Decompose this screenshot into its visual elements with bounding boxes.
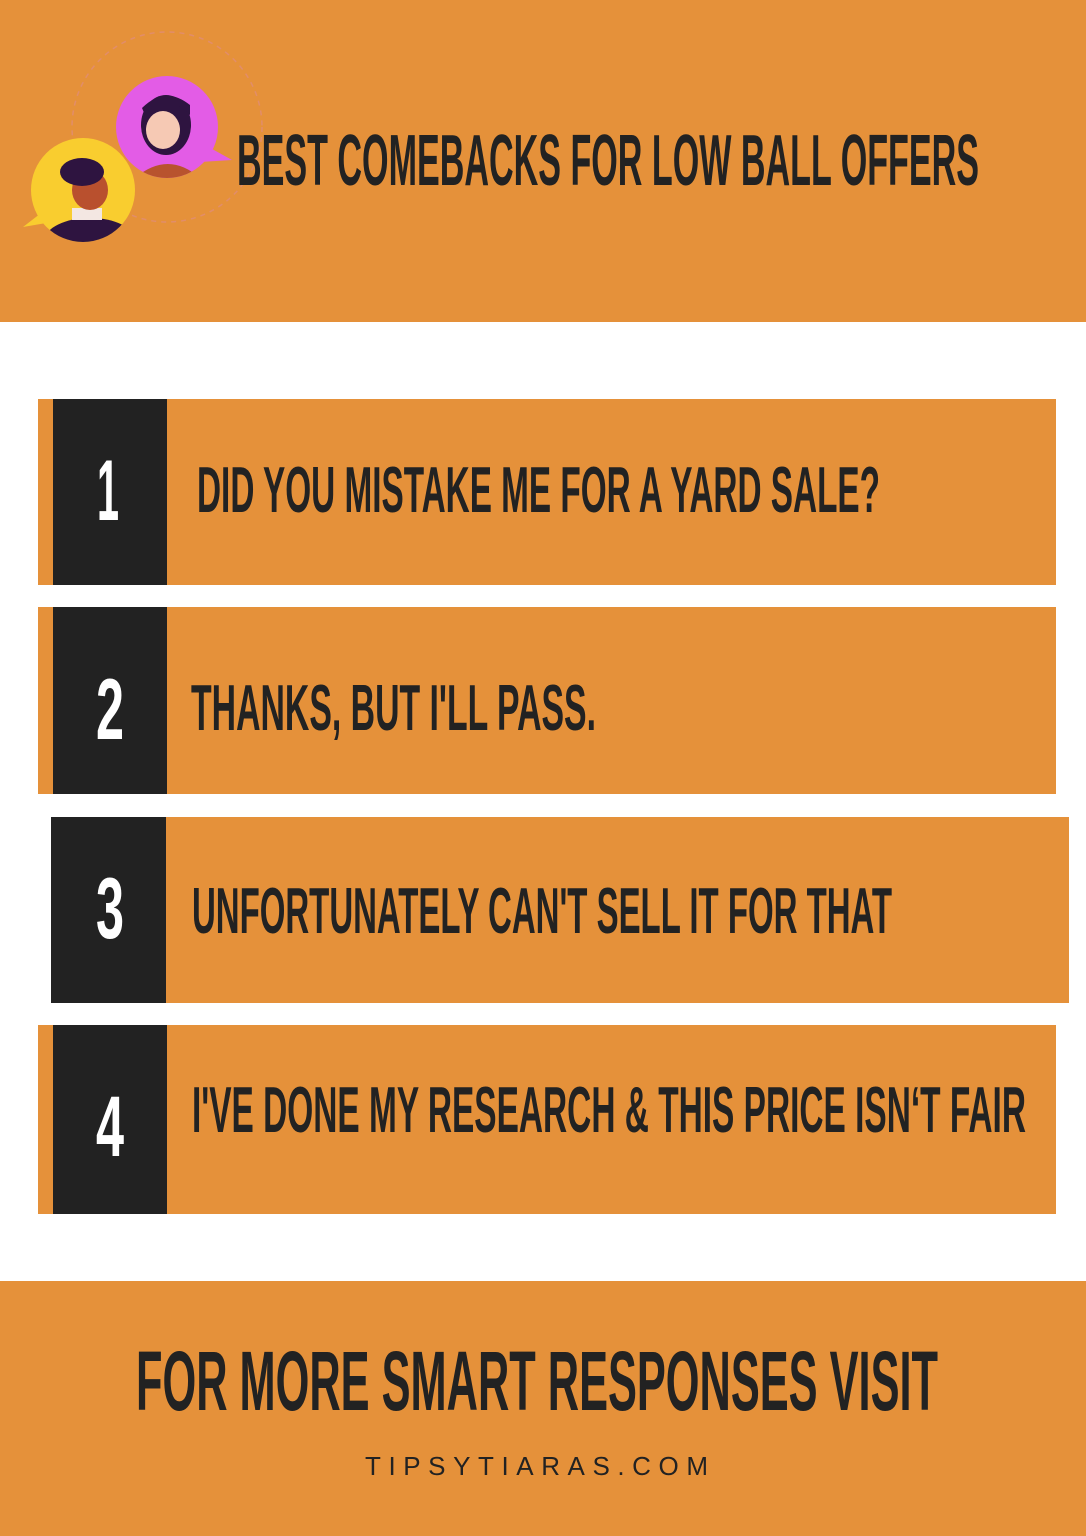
panel: item 1 [38, 399, 1056, 585]
panel: item 4 [38, 1025, 1056, 1214]
panel: item 2: 2 [96, 662, 124, 758]
panel: item 3: 3 [96, 861, 124, 957]
panel: item 1: 1 [97, 443, 119, 539]
icon: chat avatars [23, 32, 262, 262]
panel: item 3 [51, 817, 1069, 1003]
header band [0, 0, 1086, 322]
panel: item 2: THANKS, BUT I'LL PASS. [191, 671, 596, 744]
footer url: TIPSYTIARAS.COM [365, 1451, 708, 1481]
footer band [0, 1281, 1086, 1536]
panel: item 2 [38, 607, 1056, 794]
panel: item 4: 4 [96, 1079, 124, 1175]
